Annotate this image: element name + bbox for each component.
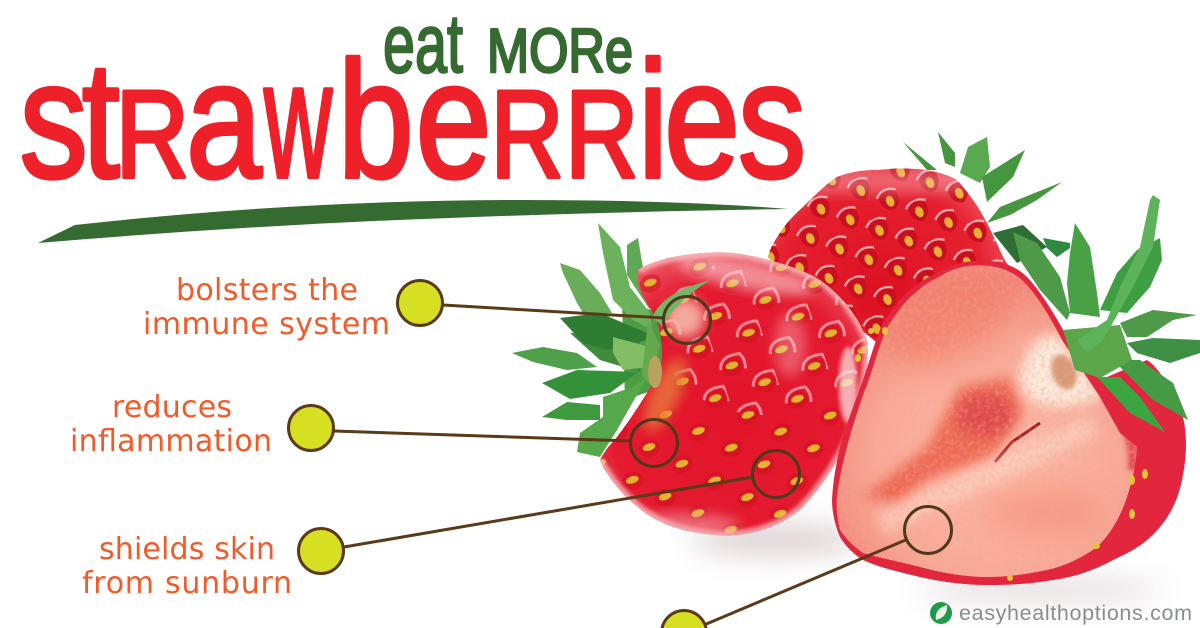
swoosh underline bbox=[38, 200, 788, 243]
title: strawberries: b bbox=[338, 28, 414, 213]
back berry seeds and highlights bbox=[768, 168, 1004, 338]
website text: easyhealthoptions.com bbox=[959, 601, 1192, 625]
lime dot bbox=[398, 280, 442, 326]
subtitle: eat more: MORe bbox=[487, 17, 633, 86]
cut berry seeds bbox=[855, 327, 1148, 581]
lime dot bbox=[298, 528, 344, 574]
cut berry flesh bbox=[837, 265, 1137, 577]
strawberry: left whole berry bbox=[512, 223, 875, 540]
lime dot bbox=[288, 406, 334, 450]
callout text: inflammation bbox=[70, 424, 272, 459]
title: strawberries: e bbox=[664, 28, 740, 213]
brand footer bbox=[930, 601, 1192, 625]
left berry calyx bbox=[613, 280, 711, 388]
title: strawberries: s bbox=[20, 28, 88, 213]
cut berry leaves and stem bbox=[1013, 195, 1200, 432]
left berry highlights bbox=[600, 247, 870, 537]
title: strawberries: R bbox=[116, 65, 189, 204]
callout text bbox=[82, 532, 292, 601]
title: strawberries: R bbox=[565, 65, 638, 204]
callout text: reduces bbox=[112, 390, 232, 425]
subtitle: eat more bbox=[383, 0, 633, 90]
title: strawberries: t bbox=[82, 28, 120, 213]
target ring bbox=[630, 420, 678, 466]
left berry leaves bbox=[512, 223, 668, 457]
connector line bbox=[344, 477, 753, 547]
back berry leaves bbox=[903, 132, 1070, 263]
strawberry: cut half berry bbox=[830, 195, 1200, 585]
connector line bbox=[443, 305, 664, 318]
connector line bbox=[704, 539, 908, 625]
callout text bbox=[70, 390, 272, 459]
title: strawberries: i bbox=[638, 28, 668, 213]
target ring bbox=[904, 506, 952, 554]
cut berry skin bbox=[832, 261, 1186, 585]
left berry body bbox=[600, 252, 868, 535]
callout text: bolsters the bbox=[176, 273, 358, 308]
lime dot bbox=[662, 610, 706, 628]
icon: leaf logo bbox=[930, 602, 952, 624]
callout: reduces inflammation bbox=[70, 390, 678, 466]
title: strawberries: a bbox=[186, 28, 262, 213]
cut berry core, pith and texture bbox=[830, 256, 1140, 583]
left berry seeds bbox=[595, 248, 875, 540]
title: strawberries: w bbox=[263, 28, 332, 213]
target ring bbox=[664, 296, 710, 344]
title: strawberries: s bbox=[738, 28, 806, 213]
target ring bbox=[752, 450, 800, 498]
callout: shields skin from sunburn bbox=[82, 450, 800, 601]
connector line bbox=[334, 431, 631, 441]
soft shadow under strawberries bbox=[690, 524, 1165, 599]
callout text bbox=[143, 273, 390, 342]
callout text: from sunburn bbox=[82, 566, 292, 601]
callout text: immune system bbox=[143, 307, 390, 342]
title: strawberries: e bbox=[416, 28, 491, 213]
title: strawberries: R bbox=[490, 65, 564, 204]
callout: cropped bottom marker bbox=[662, 506, 952, 628]
back berry body bbox=[768, 168, 1030, 360]
strawberry: back whole berry bbox=[768, 132, 1070, 342]
callout: bolsters the immune system bbox=[143, 273, 710, 344]
callout text: shields skin bbox=[99, 532, 275, 567]
